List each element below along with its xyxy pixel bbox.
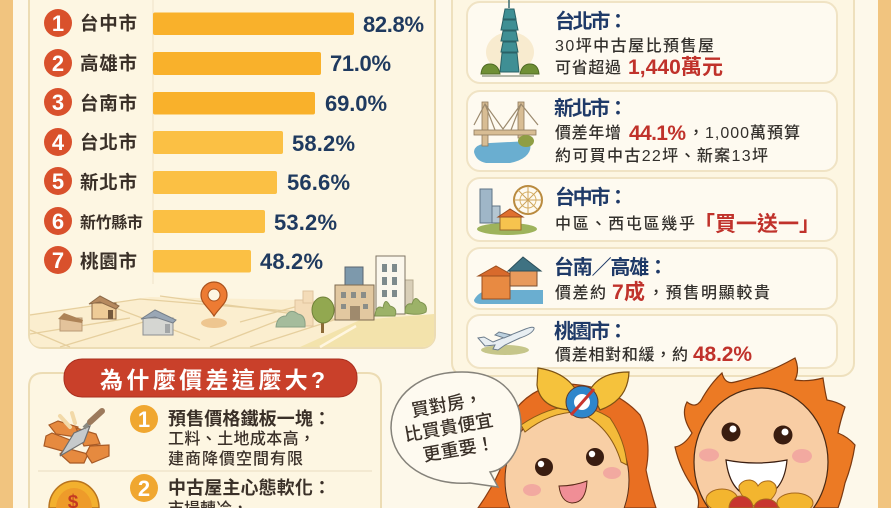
left edge band xyxy=(0,0,13,508)
panel: why the gap is so large xyxy=(29,359,381,508)
panel: city ranking xyxy=(29,0,435,348)
card: Taipei xyxy=(467,0,837,83)
card: Taoyuan: 桃園市： xyxy=(554,319,628,343)
card: Taichung: 中區、西屯區幾乎 xyxy=(555,215,695,233)
speech bubble: 買對房， xyxy=(410,389,484,421)
card: Tainan and Kaohsiung: 7成 xyxy=(612,280,645,304)
bar row 1: 台中市 xyxy=(80,13,137,34)
card: Taipei: 1,440萬元 xyxy=(628,56,723,79)
reason 1: 預售價格鐵板一塊： xyxy=(168,408,331,429)
card: Taipei: 可省超過 xyxy=(555,59,621,77)
speech bubble xyxy=(391,372,521,487)
card: New Taipei: 新北市： xyxy=(554,96,628,120)
heading pill xyxy=(64,359,357,397)
bar row 5: 5 xyxy=(52,169,64,194)
bar row 3: 台南市 xyxy=(80,93,137,114)
bar row 7: 7 xyxy=(52,248,64,273)
card: Taoyuan xyxy=(467,315,837,368)
icon: bricks and trowel xyxy=(44,411,109,463)
bar row 6 xyxy=(44,207,337,235)
bar row 5 xyxy=(44,167,350,195)
bar row 4 xyxy=(44,128,355,156)
heading pill: 為什麼價差這麼大? xyxy=(100,367,325,393)
card: Taichung xyxy=(467,178,837,241)
card: Taipei: 台北市： xyxy=(555,9,628,33)
icon: gold coin xyxy=(49,481,99,508)
card: New Taipei: ，1,000萬預算 xyxy=(688,123,800,142)
hearts bouquet xyxy=(706,480,813,508)
speech bubble: 更重要！ xyxy=(422,433,496,465)
bar row 2: 高雄市 xyxy=(80,53,137,74)
bar row 7 xyxy=(44,246,323,274)
location pin xyxy=(201,282,227,328)
bar row 1: 1 xyxy=(52,11,64,36)
speech bubble: 比買貴便宜 xyxy=(403,410,495,445)
card: New Taipei: 44.1% xyxy=(629,122,686,145)
bar row 2 xyxy=(44,49,391,77)
card: Tainan and Kaohsiung xyxy=(467,248,837,309)
card: Taichung: 「買一送一」 xyxy=(694,213,820,236)
hair bow xyxy=(537,368,629,418)
bar row 4: 台北市 xyxy=(80,132,137,153)
right edge band xyxy=(878,0,891,508)
reason 1: 建商降價空間有限 xyxy=(168,450,303,468)
bar row 4: 58.2% xyxy=(292,131,355,156)
bar row 7: 48.2% xyxy=(260,249,323,274)
card: Tainan and Kaohsiung: ，預售明顯較貴 xyxy=(648,284,770,302)
character: girl xyxy=(478,368,656,508)
bar row 3 xyxy=(44,88,387,116)
icon: ferris wheel and buildings xyxy=(477,186,542,235)
bar row 6: 6 xyxy=(52,209,64,234)
bar row 6: 新竹縣市 xyxy=(80,213,143,232)
card: New Taipei xyxy=(467,91,837,171)
bar row 1: 82.8% xyxy=(363,12,424,37)
reason 2 xyxy=(130,474,331,508)
bar row 3: 3 xyxy=(52,90,64,115)
reason 1: 1 xyxy=(138,407,150,432)
bar row 7: 桃園市 xyxy=(80,251,137,272)
bar row 5: 新北市 xyxy=(80,172,137,193)
bar row 5: 56.6% xyxy=(287,170,350,195)
card: New Taipei: 價差年增 xyxy=(555,124,621,142)
house: small brown xyxy=(58,313,83,331)
card: Taichung: 台中市： xyxy=(555,185,628,209)
panel: city notes xyxy=(452,0,854,376)
bar row 2: 2 xyxy=(52,51,64,76)
icon: bridge xyxy=(474,102,538,163)
card: Taoyuan: 48.2% xyxy=(693,343,752,366)
house: tan xyxy=(89,296,119,319)
icon: Taipei 101 xyxy=(481,0,539,76)
bar row 4: 4 xyxy=(52,130,65,155)
reason 1 xyxy=(130,405,331,468)
buildings and trees xyxy=(276,256,426,333)
house: grey xyxy=(141,310,176,335)
bar row 2: 71.0% xyxy=(330,51,391,76)
map illustration xyxy=(30,256,434,347)
bar row 3: 69.0% xyxy=(325,91,387,116)
reason 2: 中古屋主心態軟化： xyxy=(168,478,331,498)
character: boy xyxy=(675,358,855,508)
reason 1: 工料、土地成本高， xyxy=(168,430,315,448)
icon: airplane xyxy=(478,327,534,355)
icon: temples xyxy=(474,257,543,304)
card: Taipei: 30坪中古屋比預售屋 xyxy=(555,37,714,55)
bar row 6: 53.2% xyxy=(274,210,337,235)
card: New Taipei: 約可買中古22坪、新案13坪 xyxy=(555,146,768,165)
card: Tainan and Kaohsiung: 台南／高雄： xyxy=(554,255,668,279)
reason 2: 2 xyxy=(138,476,150,501)
card: Tainan and Kaohsiung: 價差約 xyxy=(555,284,606,302)
bar row 1 xyxy=(44,9,424,37)
card: Taoyuan: 價差相對和緩，約 xyxy=(555,346,688,364)
